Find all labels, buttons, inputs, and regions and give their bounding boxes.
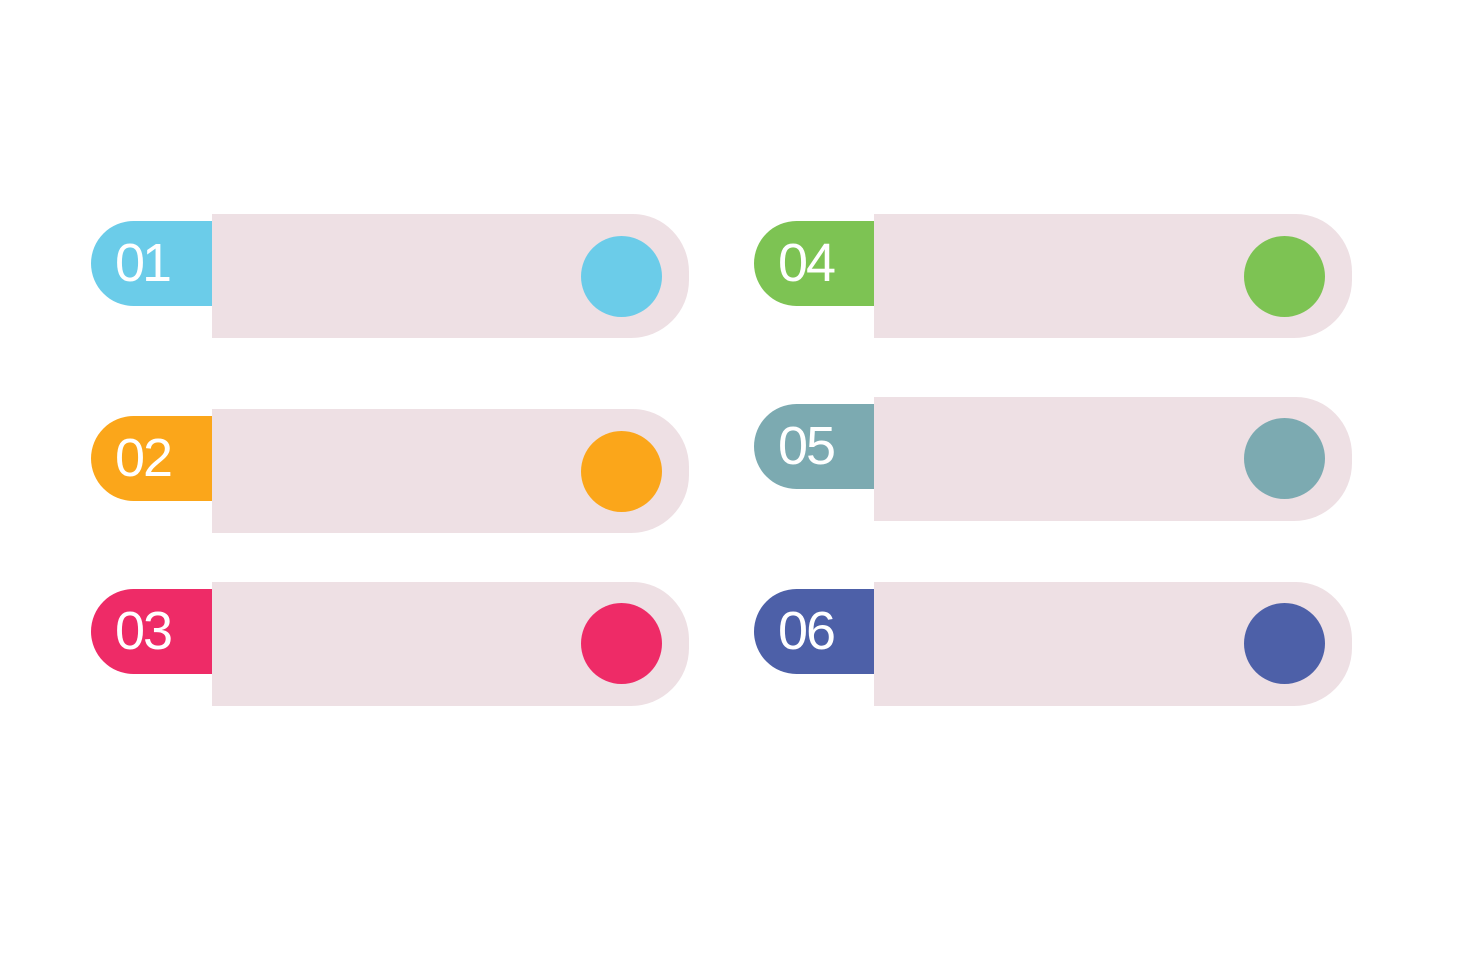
dot 04 xyxy=(1244,236,1325,316)
number 04: 04 xyxy=(778,233,834,293)
tab 06 xyxy=(754,588,874,674)
number 01: 01 xyxy=(115,233,169,293)
item 03 xyxy=(91,582,689,706)
number 02: 02 xyxy=(115,428,171,488)
number 06: 06 xyxy=(778,601,834,661)
panel 06 xyxy=(874,582,1352,706)
panel 01 xyxy=(212,214,689,338)
dot 05 xyxy=(1244,418,1325,499)
item 01 xyxy=(91,214,689,338)
tab 01 xyxy=(91,221,212,306)
item 05 xyxy=(754,397,1352,521)
number 03: 03 xyxy=(115,601,171,661)
panel 04 xyxy=(874,214,1352,338)
dot 01 xyxy=(581,236,662,316)
item 06 xyxy=(754,582,1352,706)
tab 05 xyxy=(754,404,874,489)
tab 04 xyxy=(754,221,874,306)
panel 05 xyxy=(874,397,1352,521)
item 02 xyxy=(91,409,689,533)
number 05: 05 xyxy=(778,416,834,476)
dot 02 xyxy=(581,431,662,512)
item 04 xyxy=(754,214,1352,338)
dot 03 xyxy=(581,603,662,684)
tab 02 xyxy=(91,416,212,501)
dot 06 xyxy=(1244,603,1325,684)
panel 03 xyxy=(212,582,689,706)
tab 03 xyxy=(91,588,212,674)
panel 02 xyxy=(212,409,689,533)
